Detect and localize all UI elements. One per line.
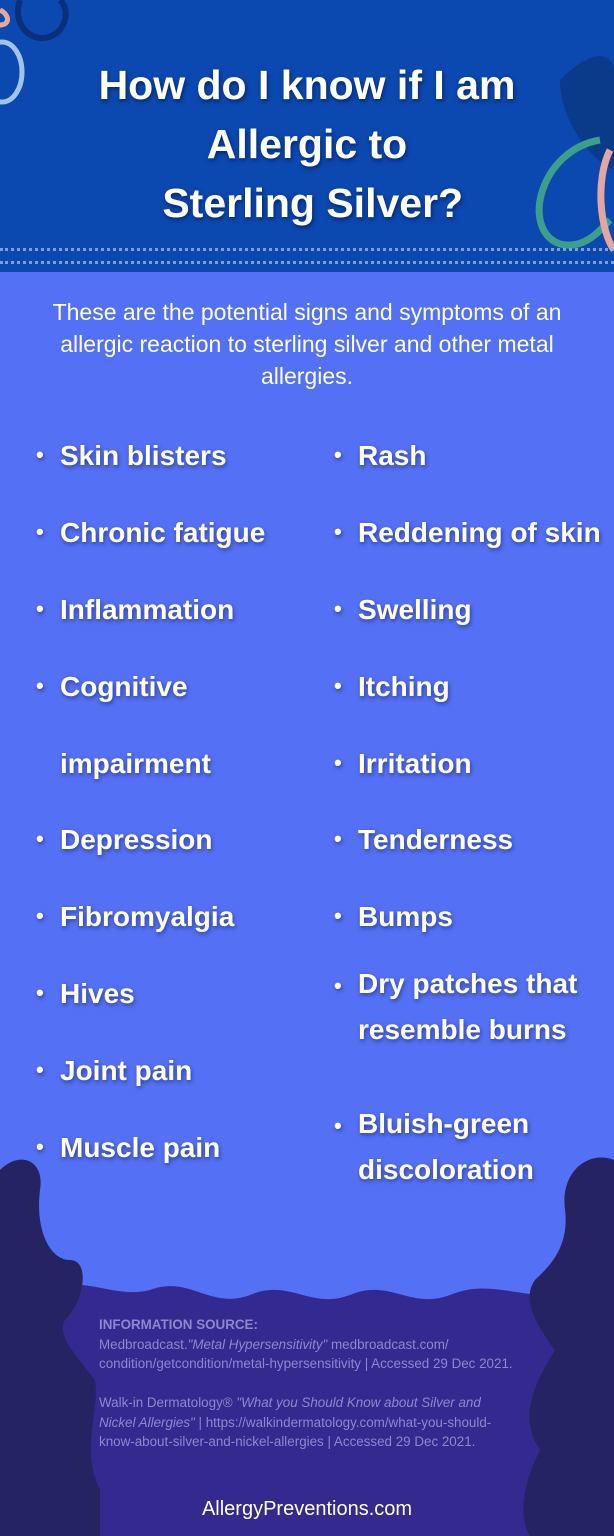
symptoms right column: discoloration	[358, 1154, 534, 1185]
symptoms right column: Tenderness	[358, 824, 513, 855]
information source: INFORMATION SOURCE:	[99, 1317, 258, 1332]
symptoms right column: Swelling	[358, 594, 472, 625]
symptoms right column: Bumps	[358, 901, 453, 932]
symptoms left column: Muscle pain	[60, 1132, 220, 1163]
symptoms right column	[334, 440, 603, 1185]
information source	[99, 1317, 513, 1449]
symptoms left column: Cognitive	[60, 671, 188, 702]
title: How do I know if I am	[99, 62, 515, 108]
decorative shapes	[0, 0, 614, 252]
bottom background shapes	[0, 1158, 614, 1536]
title: Sterling Silver?	[162, 180, 463, 226]
symptoms right column: Bluish-green	[358, 1108, 529, 1139]
symptoms left column: Chronic fatigue	[60, 517, 265, 548]
symptoms right column: Itching	[358, 671, 450, 702]
information source: Medbroadcast."Metal Hypersensitivity" medbroadcast.com/ condition/getcondition/metal-hypersensitivity | Accessed 29 Dec 2021.	[99, 1336, 513, 1371]
symptoms left column: Inflammation	[60, 594, 234, 625]
symptoms right column: Rash	[358, 440, 426, 471]
symptoms left column: Hives	[60, 978, 135, 1009]
symptoms left column: Depression	[60, 824, 212, 855]
symptoms right column: Irritation	[358, 748, 472, 779]
title: Allergic to	[207, 121, 407, 167]
symptoms left column: Fibromyalgia	[60, 901, 234, 932]
title	[99, 62, 516, 230]
symptoms left column: Joint pain	[60, 1055, 192, 1086]
information source: Walk-in Dermatology® "What you Should Know about Silver and Nickel Allergies" | https://walkindermatology.com/what-you-should-know-about-silver-and-nickel-allergies | Accessed 29 Dec 2021.	[99, 1395, 491, 1449]
symptoms left column: Skin blisters	[60, 440, 227, 471]
symptoms left column: impairment	[60, 748, 211, 779]
website footer: AllergyPreventions.com	[202, 1498, 412, 1520]
symptoms right column: Dry patches that	[358, 968, 577, 999]
symptoms right column: Reddening of skin	[358, 517, 601, 548]
symptoms right column: resemble burns	[358, 1014, 567, 1045]
intro text: These are the potential signs and symptoms of an allergic reaction to sterling silver and other metal allergies.	[53, 299, 561, 389]
chain border	[0, 248, 614, 264]
symptoms left column	[36, 440, 268, 1167]
header band	[0, 0, 614, 272]
